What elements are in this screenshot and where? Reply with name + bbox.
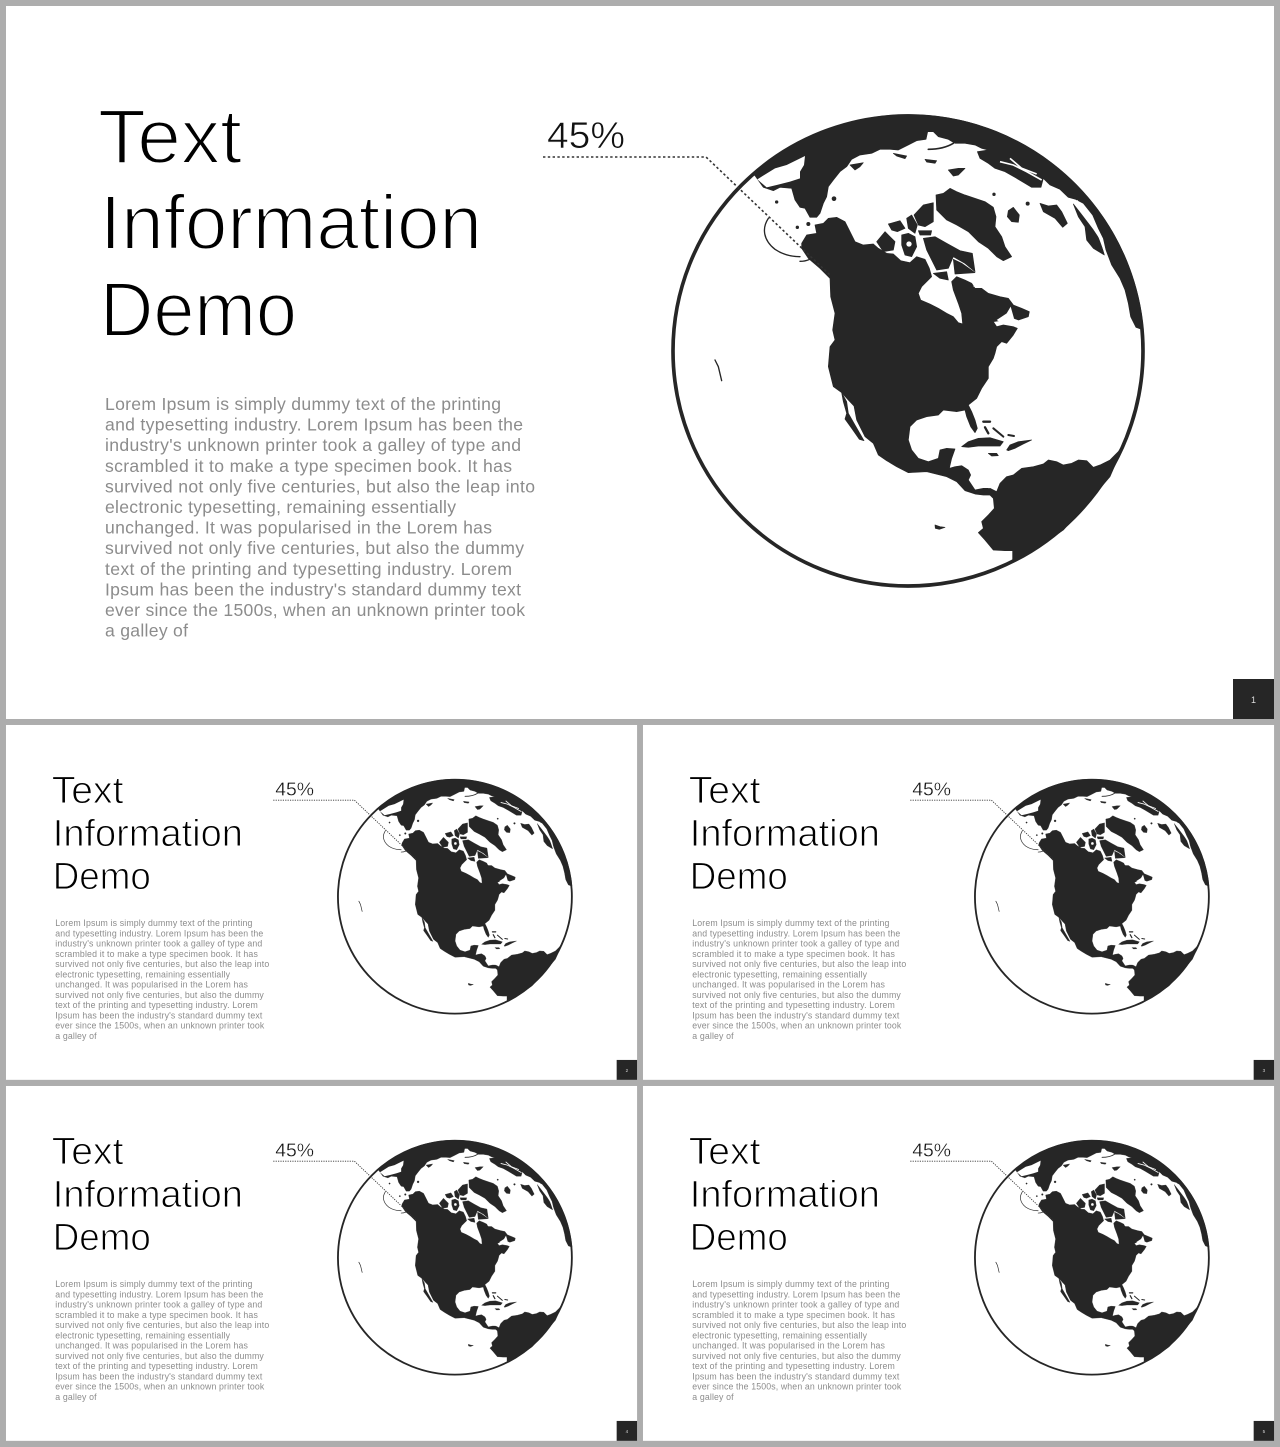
page number <box>617 1421 637 1441</box>
body text: a galley of <box>55 1031 97 1041</box>
body text: Lorem Ipsum is simply dummy text of the printing <box>105 394 501 414</box>
title: Information <box>100 180 482 266</box>
leader line <box>273 1161 416 1220</box>
body text: survived not only five centuries, but also the dummy <box>692 1351 901 1361</box>
body text: electronic typesetting, remaining essentially <box>105 497 456 517</box>
panel: slide 4 <box>6 1086 637 1441</box>
globe <box>673 115 1143 586</box>
page number: 3 <box>1263 1068 1266 1073</box>
body text: electronic typesetting, remaining essentially <box>55 969 231 979</box>
body text <box>105 394 535 641</box>
title: Demo <box>53 855 151 898</box>
body text: text of the printing and typesetting industry. Lorem <box>55 1000 258 1010</box>
page number: 4 <box>626 1429 629 1434</box>
body text: electronic typesetting, remaining essentially <box>55 1330 231 1340</box>
leader line <box>543 157 830 275</box>
body text: ever since the 1500s, when an unknown printer took <box>105 600 525 620</box>
body text: and typesetting industry. Lorem Ipsum has been the <box>55 928 263 938</box>
leader line <box>273 800 416 859</box>
title: Text <box>689 1130 761 1173</box>
body text: industry's unknown printer took a galley of type and <box>55 1300 262 1310</box>
body text: Ipsum has been the industry's standard dummy text <box>55 1010 263 1020</box>
leader line <box>910 1161 1053 1220</box>
body text: unchanged. It was popularised in the Lorem has <box>692 980 885 990</box>
percentage label: 45% <box>912 1140 951 1161</box>
body text: electronic typesetting, remaining essentially <box>692 1330 868 1340</box>
page number: 5 <box>1263 1429 1266 1434</box>
body text: survived not only five centuries, but also the leap into <box>55 1320 269 1330</box>
body text: scrambled it to make a type specimen book. It has <box>105 456 512 476</box>
title <box>98 94 482 353</box>
body text: scrambled it to make a type specimen book. It has <box>692 1310 895 1320</box>
page number <box>617 1060 637 1080</box>
title: Information <box>53 1173 243 1216</box>
leader line <box>910 800 1053 859</box>
globe <box>338 779 572 1014</box>
percentage label: 45% <box>275 1140 314 1161</box>
body text: text of the printing and typesetting industry. Lorem <box>105 559 512 579</box>
body text: text of the printing and typesetting industry. Lorem <box>692 1000 895 1010</box>
title: Information <box>53 812 243 855</box>
title: Text <box>52 1130 124 1173</box>
body text: ever since the 1500s, when an unknown printer took <box>55 1382 265 1392</box>
title <box>52 1130 243 1259</box>
body text: ever since the 1500s, when an unknown printer took <box>55 1021 265 1031</box>
panel: slide 2 <box>6 725 637 1080</box>
title: Information <box>690 1173 880 1216</box>
body text: scrambled it to make a type specimen book. It has <box>55 1310 258 1320</box>
percentage label: 45% <box>912 779 951 800</box>
page number <box>1254 1060 1274 1080</box>
panel: slide 1 <box>6 6 1274 719</box>
title: Text <box>689 769 761 812</box>
panel: slide 3 <box>643 725 1274 1080</box>
body text: industry's unknown printer took a galley of type and <box>105 435 521 455</box>
body text: and typesetting industry. Lorem Ipsum has been the <box>105 415 523 435</box>
body text: survived not only five centuries, but also the leap into <box>55 959 269 969</box>
page number <box>1233 679 1274 719</box>
body text: industry's unknown printer took a galley of type and <box>55 939 262 949</box>
body text: Lorem Ipsum is simply dummy text of the printing <box>692 1279 889 1289</box>
body text: Ipsum has been the industry's standard dummy text <box>55 1371 263 1381</box>
body text: Lorem Ipsum is simply dummy text of the printing <box>55 918 252 928</box>
body text: ever since the 1500s, when an unknown printer took <box>692 1021 902 1031</box>
title: Demo <box>690 1216 788 1259</box>
title: Text <box>98 94 242 180</box>
body text <box>55 918 269 1041</box>
title: Demo <box>53 1216 151 1259</box>
panel: slide 5 <box>643 1086 1274 1441</box>
body text: and typesetting industry. Lorem Ipsum has been the <box>692 928 900 938</box>
globe <box>975 779 1209 1014</box>
title: Text <box>52 769 124 812</box>
body text: industry's unknown printer took a galley of type and <box>692 1300 899 1310</box>
title <box>52 769 243 898</box>
percentage label: 45% <box>275 779 314 800</box>
body text: scrambled it to make a type specimen book. It has <box>55 949 258 959</box>
page number: 2 <box>626 1068 629 1073</box>
body text: a galley of <box>105 621 188 641</box>
body text: Lorem Ipsum is simply dummy text of the printing <box>692 918 889 928</box>
title: Demo <box>690 855 788 898</box>
body text: unchanged. It was popularised in the Lorem has <box>105 518 492 538</box>
percentage label: 45% <box>547 115 625 156</box>
body text: unchanged. It was popularised in the Lorem has <box>692 1341 885 1351</box>
body text: survived not only five centuries, but also the dummy <box>55 1351 264 1361</box>
body text: survived not only five centuries, but also the leap into <box>105 476 535 496</box>
body text: scrambled it to make a type specimen book. It has <box>692 949 895 959</box>
body text: a galley of <box>692 1392 734 1402</box>
title <box>689 769 880 898</box>
body text: Lorem Ipsum is simply dummy text of the printing <box>55 1279 252 1289</box>
body text: survived not only five centuries, but also the dummy <box>105 538 524 558</box>
body text: and typesetting industry. Lorem Ipsum has been the <box>55 1289 263 1299</box>
body text <box>692 918 906 1041</box>
title: Information <box>690 812 880 855</box>
body text: electronic typesetting, remaining essentially <box>692 969 868 979</box>
body text: survived not only five centuries, but also the leap into <box>692 1320 906 1330</box>
body text: unchanged. It was popularised in the Lorem has <box>55 1341 248 1351</box>
body text: Ipsum has been the industry's standard dummy text <box>692 1010 900 1020</box>
body text: a galley of <box>692 1031 734 1041</box>
body text: Ipsum has been the industry's standard dummy text <box>692 1371 900 1381</box>
body text: ever since the 1500s, when an unknown printer took <box>692 1382 902 1392</box>
body text: survived not only five centuries, but also the dummy <box>55 990 264 1000</box>
body text: survived not only five centuries, but also the leap into <box>692 959 906 969</box>
globe <box>975 1140 1209 1375</box>
page number <box>1254 1421 1274 1441</box>
body text <box>692 1279 906 1402</box>
body text: survived not only five centuries, but also the dummy <box>692 990 901 1000</box>
body text: and typesetting industry. Lorem Ipsum has been the <box>692 1289 900 1299</box>
body text: industry's unknown printer took a galley of type and <box>692 939 899 949</box>
body text: unchanged. It was popularised in the Lorem has <box>55 980 248 990</box>
page number: 1 <box>1251 695 1256 705</box>
body text <box>55 1279 269 1402</box>
body text: a galley of <box>55 1392 97 1402</box>
title: Demo <box>100 267 297 353</box>
globe <box>338 1140 572 1375</box>
body text: Ipsum has been the industry's standard dummy text <box>105 579 521 599</box>
body text: text of the printing and typesetting industry. Lorem <box>55 1361 258 1371</box>
title <box>689 1130 880 1259</box>
body text: text of the printing and typesetting industry. Lorem <box>692 1361 895 1371</box>
